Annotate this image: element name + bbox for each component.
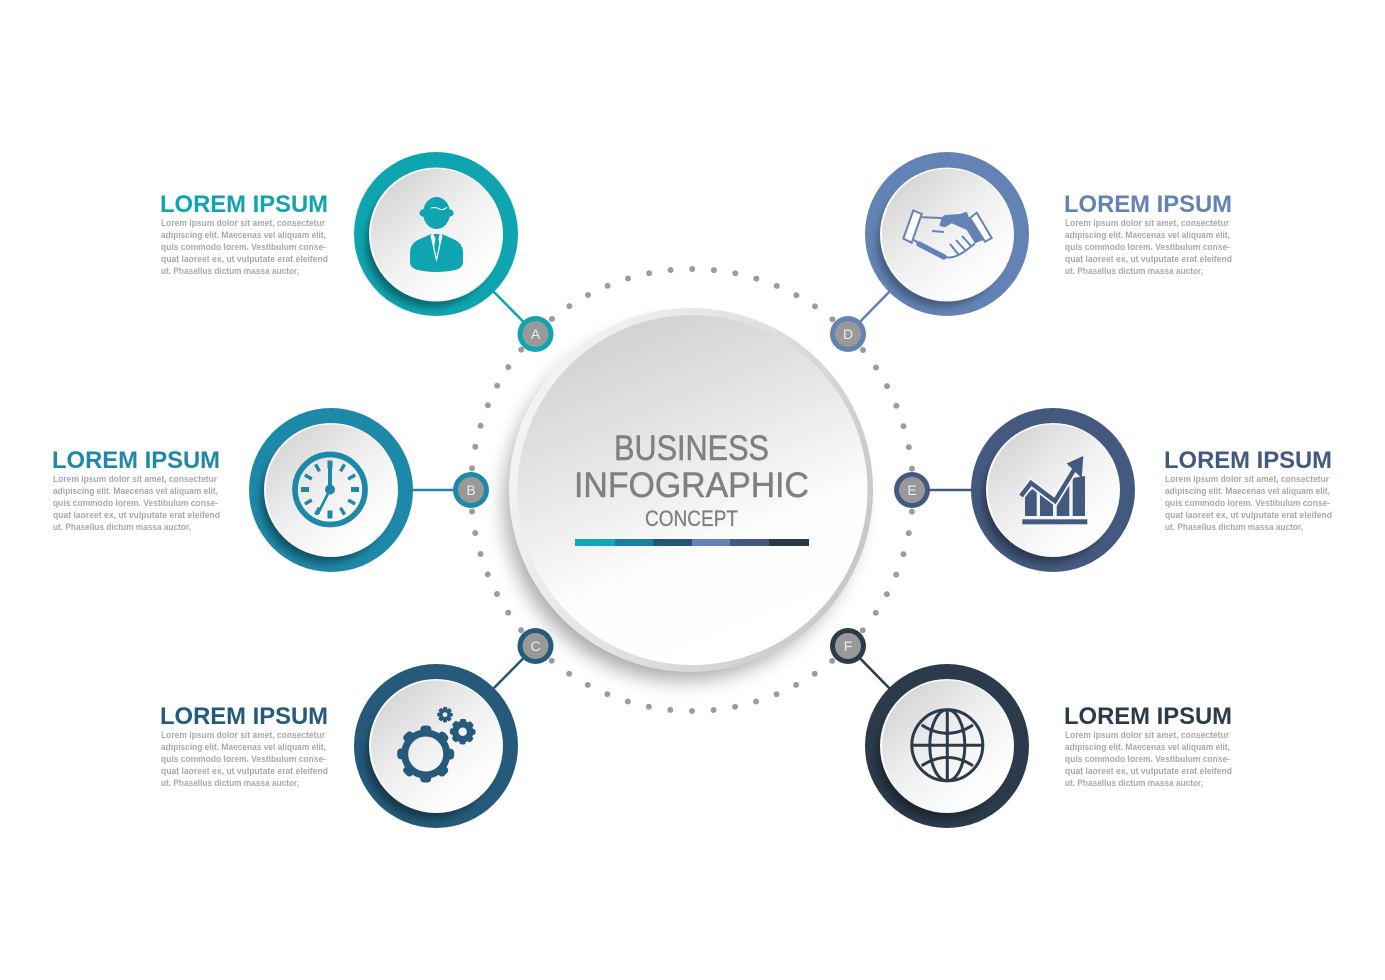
badge F [830,628,866,664]
heading E: LOREM IPSUM [1164,447,1332,474]
circle D [865,152,1029,316]
text C: ut. Phasellus dictum massa auctor, [161,778,299,788]
text B: quat laoreet ex, ut vulputate erat eleifend [53,510,220,520]
panel: B clock [52,408,489,572]
text F: adipiscing elit. Maecenas vel aliquam elit, [1065,742,1230,752]
connector B [410,489,471,491]
text D [1065,218,1232,276]
text A: quis commodo lorem. Vestibulum conse- [161,242,326,252]
text C: Lorem ipsum dolor sit amet, consectetur [161,730,325,740]
panel: A person [160,152,554,352]
text A [161,218,328,276]
icon: growth chart [1021,456,1087,524]
badge A [518,316,554,352]
circle B [249,408,413,572]
icon: person [410,197,463,272]
text C [161,730,328,788]
circle E [971,408,1135,572]
text E: ut. Phasellus dictum massa auctor, [1165,522,1303,532]
badge B [453,472,489,508]
text E: quat laoreet ex, ut vulputate erat eleifend [1165,510,1332,520]
text E [1165,474,1332,532]
connector D [848,288,893,334]
text C: adipiscing elit. Maecenas vel aliquam elit, [161,742,326,752]
text B: adipiscing elit. Maecenas vel aliquam elit, [53,486,218,496]
text F [1065,730,1232,788]
dotted ring [471,269,913,711]
title: CONCEPT [645,506,738,531]
text F: quis commodo lorem. Vestibulum conse- [1065,754,1230,764]
badge B: B [466,482,476,498]
colour bar [575,539,809,546]
text C: quis commodo lorem. Vestibulum conse- [161,754,326,764]
badge E [894,472,930,508]
heading B: LOREM IPSUM [52,447,220,474]
heading D: LOREM IPSUM [1064,191,1232,218]
title: INFOGRAPHIC [574,466,809,505]
text B: ut. Phasellus dictum massa auctor, [53,522,191,532]
text D: ut. Phasellus dictum massa auctor, [1065,266,1203,276]
connector C [490,646,536,692]
badge D: D [843,326,853,342]
circle C [354,664,518,828]
text C: quat laoreet ex, ut vulputate erat eleifend [161,766,328,776]
text B: quis commodo lorem. Vestibulum conse- [53,498,218,508]
panel: C gears [160,628,554,828]
badge A: A [531,326,541,342]
panel: F globe [830,628,1232,828]
text A: quat laoreet ex, ut vulputate erat eleifend [161,254,328,264]
text B [53,474,220,532]
heading F: LOREM IPSUM [1064,703,1232,730]
connector E [912,489,975,491]
text D: Lorem ipsum dolor sit amet, consectetur [1065,218,1229,228]
badge D [830,316,866,352]
icon: gears [401,708,474,779]
icon: handshake [903,210,992,257]
text A: adipiscing elit. Maecenas vel aliquam elit, [161,230,326,240]
text E: adipiscing elit. Maecenas vel aliquam elit, [1165,486,1330,496]
heading A: LOREM IPSUM [160,191,328,218]
title: BUSINESS [614,429,769,468]
panel: E chart [894,408,1332,572]
badge E: E [907,482,917,498]
badge C [518,628,554,664]
text A: ut. Phasellus dictum massa auctor, [161,266,299,276]
icon: globe [912,710,983,781]
panel: D handshake [830,152,1232,352]
center circle shadow [505,326,859,680]
center circle disc [518,315,868,665]
text D: adipiscing elit. Maecenas vel aliquam elit, [1065,230,1230,240]
text F: ut. Phasellus dictum massa auctor, [1065,778,1203,788]
text A: Lorem ipsum dolor sit amet, consectetur [161,218,325,228]
badge F: F [844,638,852,654]
panel: center circle [505,308,873,680]
text D: quis commodo lorem. Vestibulum conse- [1065,242,1230,252]
heading C: LOREM IPSUM [160,703,328,730]
circle F [865,664,1029,828]
text F: Lorem ipsum dolor sit amet, consectetur [1065,730,1229,740]
circle A [354,152,518,316]
center circle rim [509,308,873,672]
icon: clock [295,454,365,524]
text D: quat laoreet ex, ut vulputate erat eleifend [1065,254,1232,264]
title [574,429,809,531]
text E: quis commodo lorem. Vestibulum conse- [1165,498,1330,508]
connector F [848,646,893,692]
text F: quat laoreet ex, ut vulputate erat eleifend [1065,766,1232,776]
connector A [490,288,536,334]
text B: Lorem ipsum dolor sit amet, consectetur [53,474,217,484]
badge C: C [530,638,541,654]
text E: Lorem ipsum dolor sit amet, consectetur [1165,474,1329,484]
